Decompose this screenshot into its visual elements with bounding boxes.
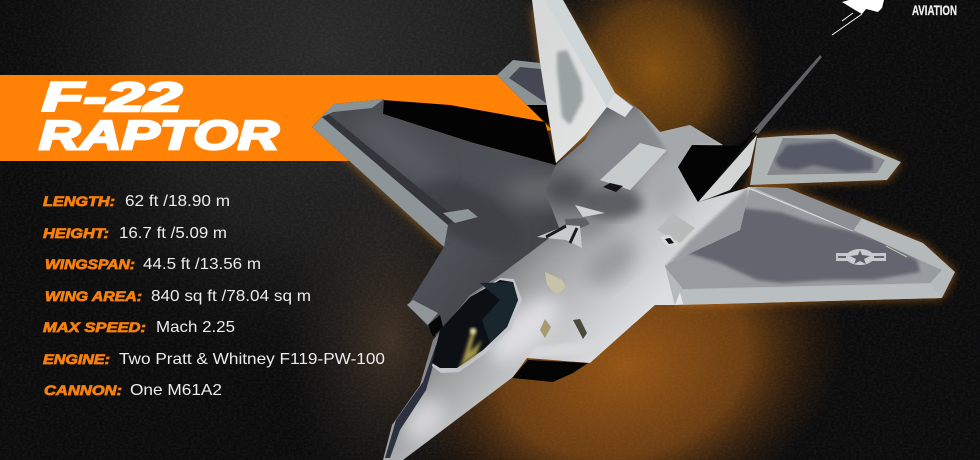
specifications list: Two Pratt & Whitney F119-PW-100 [119,351,385,368]
light panel [600,143,667,190]
orange title band [0,75,552,161]
specifications list: ENGINE: [43,352,110,367]
title: F-22 [42,74,182,120]
silver fin root [698,135,757,202]
exhaust marks [575,205,605,217]
vertical fin edge [752,55,822,134]
specifications list: 16.7 ft /5.09 m [119,225,227,242]
right tailplane [750,134,901,185]
tan panels [545,272,566,295]
specifications list: WING AREA: [45,289,142,304]
shadow under left wing [383,100,556,165]
specifications list: HEIGHT: [43,226,109,241]
specifications list: CANNON: [44,383,122,398]
logo: plane and wordmark [832,0,957,35]
logo: plane and wordmark: AVIATION [912,2,957,18]
specifications list: WINGSPAN: [45,257,135,272]
left vertical fin [532,0,633,163]
canopy [432,278,522,373]
underside intake [512,360,588,382]
nose shadow edge [385,345,439,458]
fuselage [383,93,758,460]
specifications list: 840 sq ft /78.04 sq m [151,288,311,305]
specifications list: 44.5 ft /13.56 m [143,256,261,273]
specifications list: One M61A2 [130,382,222,399]
left wing [312,99,559,337]
title [39,74,280,158]
title: RAPTOR [39,112,280,158]
black intake [678,128,758,202]
specifications list: LENGTH: [43,194,115,209]
rear left stabilizer [497,60,549,125]
roundel insignia [836,249,886,265]
right wing [665,187,955,305]
specifications list: Mach 2.25 [156,319,235,336]
right wing root notch [675,292,683,305]
F-22 jet illustration [312,0,955,460]
specifications list: 62 ft /18.90 m [125,193,230,210]
jet outline glow [312,8,955,305]
specifications list [43,193,385,399]
diamond vent [660,235,678,247]
specifications list: MAX SPEED: [43,320,146,335]
